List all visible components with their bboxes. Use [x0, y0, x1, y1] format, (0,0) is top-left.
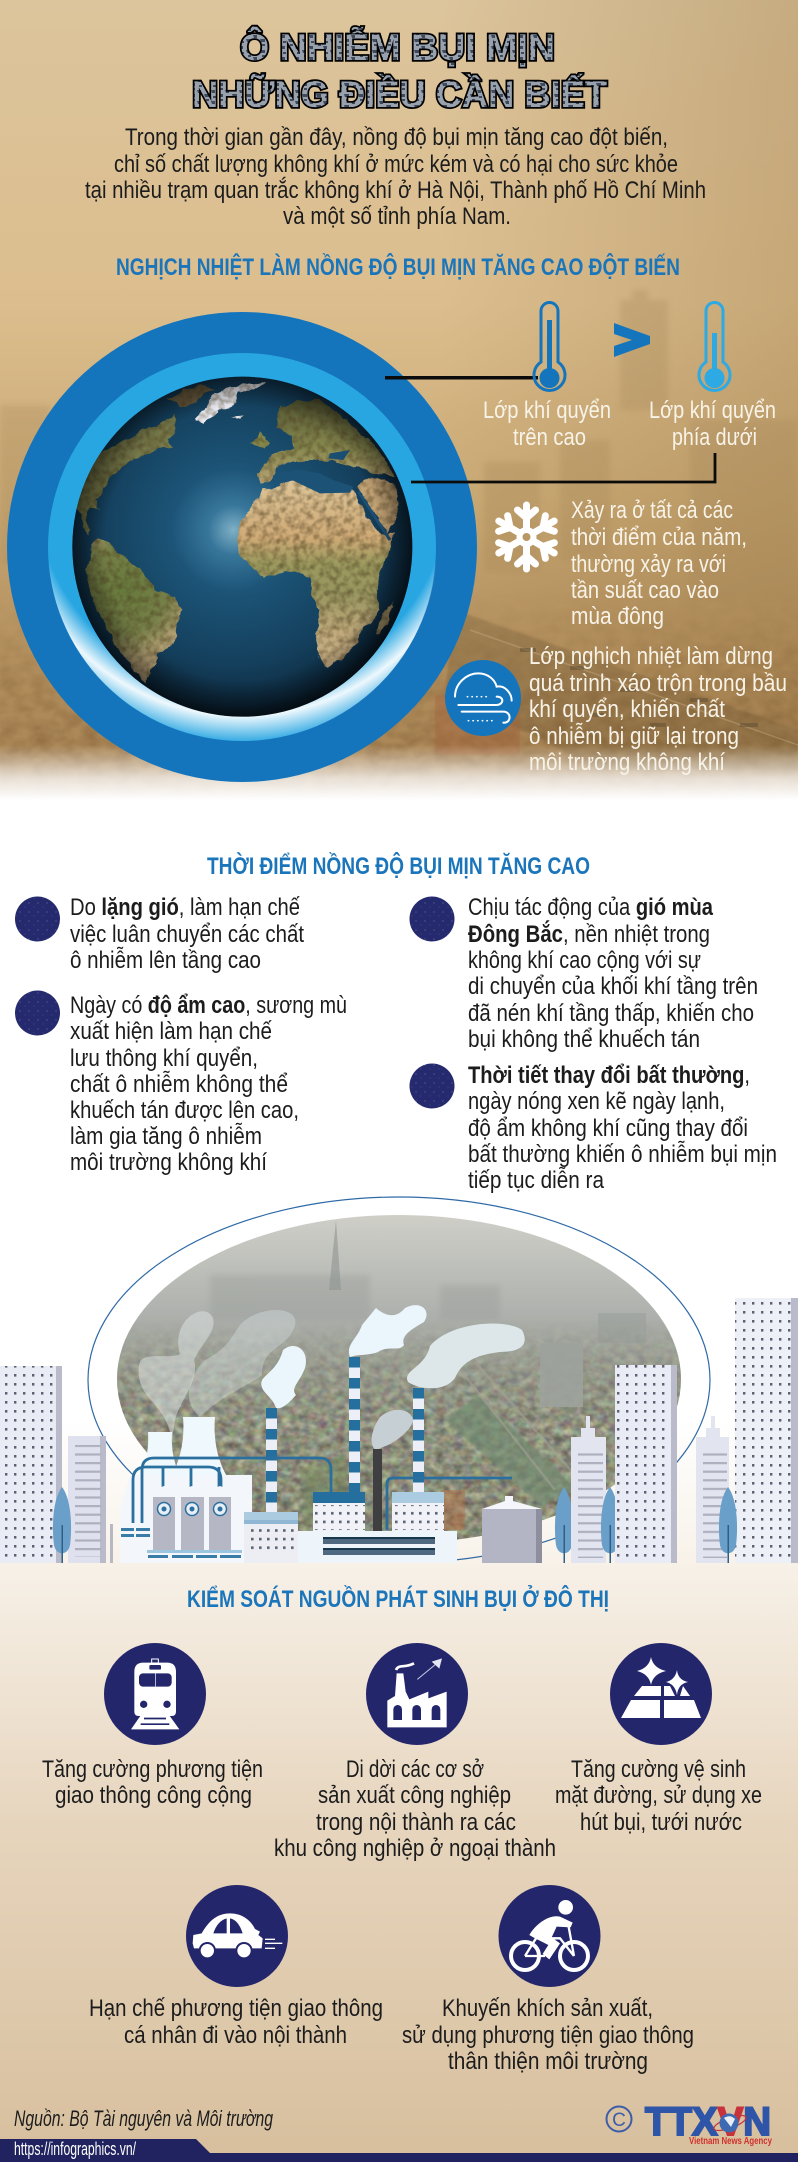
heading: control sources: KIỂM SOÁT NGUỒN PHÁT SINH BỤI Ở ĐÔ THỊ	[187, 1584, 609, 1613]
thermometer: upper layer	[534, 303, 565, 390]
bullet: northeast monsoon: di chuyển của khối khí tầng trên	[468, 973, 758, 1000]
bullet: abnormal weather: tiếp tục diễn ra	[468, 1167, 605, 1194]
title	[192, 26, 607, 115]
bullet: abnormal weather: Thời tiết thay đổi bất thường,	[468, 1062, 750, 1089]
pipes	[133, 1458, 512, 1530]
plant hall	[120, 1475, 252, 1563]
bullet: high humidity: chất ô nhiễm không thể	[70, 1071, 288, 1098]
building: spire tower	[571, 1416, 606, 1563]
logo: TTXVN	[606, 2100, 772, 2147]
bullet: no wind: Do lặng gió, làm hạn chế	[70, 894, 301, 921]
text: limit private vehicles	[89, 1995, 383, 2049]
icon: road cleaning	[610, 1643, 712, 1745]
building: dotted tower	[615, 1365, 677, 1563]
building: second spire tower	[696, 1416, 729, 1563]
text: when inversion occurs: tần suất cao vào	[571, 577, 719, 604]
bullet: high humidity: khuếch tán được lên cao,	[70, 1097, 299, 1124]
greater than sign	[614, 323, 650, 357]
lower panel background	[0, 1563, 798, 2162]
bullet: no wind	[15, 894, 304, 974]
plant base	[121, 1528, 242, 1558]
bullet: high humidity: làm gia tăng ô nhiễm	[70, 1123, 262, 1150]
power plant	[110, 1357, 542, 1563]
text: relocate factories: sản xuất công nghiệp	[318, 1782, 511, 1809]
label: lower layer: phía dưới	[672, 424, 757, 451]
cooling towers	[140, 1417, 228, 1478]
bullet: northeast monsoon: Chịu tác động của gió mùa	[468, 894, 714, 921]
label: lower layer	[649, 397, 776, 451]
small building	[244, 1512, 298, 1563]
text: when inversion occurs: Xảy ra ở tất cả các	[571, 497, 733, 524]
wordmark: TTXVN	[645, 2100, 771, 2144]
photo: smoggy city	[117, 1215, 681, 1540]
text: eco-friendly vehicles	[402, 1995, 694, 2075]
thermometer: lower layer	[699, 302, 730, 390]
outer atmosphere ring	[7, 312, 477, 782]
tree	[53, 1487, 71, 1563]
tree	[601, 1487, 619, 1563]
building: striped tower left	[68, 1436, 106, 1563]
agency name: Vietnam News Agency	[689, 2136, 772, 2147]
text: public transport	[42, 1756, 263, 1809]
bullet: abnormal weather	[410, 1062, 777, 1194]
text: eco-friendly vehicles: thân thiện môi trường	[448, 2048, 648, 2075]
label: upper layer	[483, 397, 611, 451]
building: far left tower	[0, 1366, 62, 1563]
url: https://infographics.vn/	[14, 2139, 136, 2159]
bullet: northeast monsoon: Đông Bắc, nền nhiệt trong	[468, 920, 710, 948]
text: road cleaning: hút bụi, tưới nước	[580, 1809, 742, 1836]
bullet: northeast monsoon	[410, 894, 758, 1053]
text: road cleaning	[555, 1756, 762, 1836]
text: effect of inversion: ô nhiễm bị giữ lại trong	[529, 723, 739, 750]
smoke plumes	[139, 1305, 525, 1450]
label: upper layer: trên cao	[513, 424, 586, 451]
line: lower layer	[411, 453, 715, 482]
text: relocate factories: khu công nghiệp ở ngoại thành	[274, 1835, 556, 1862]
text: effect of inversion	[529, 643, 787, 776]
text: when inversion occurs	[571, 497, 747, 630]
bullet: northeast monsoon: bụi không thể khuếch tán	[468, 1026, 700, 1053]
bullet: abnormal weather: ngày nóng xen kẽ ngày lạnh,	[468, 1088, 725, 1115]
footer bar	[0, 2139, 798, 2162]
bullet: high humidity: lưu thông khí quyển,	[70, 1045, 258, 1072]
text: effect of inversion: khí quyển, khiến chất	[529, 696, 725, 723]
intro text	[85, 124, 706, 230]
intro text: Trong thời gian gần đây, nồng độ bụi mịn tăng cao đột biến,	[125, 124, 668, 151]
text: eco-friendly vehicles: Khuyến khích sản xuất,	[442, 1995, 653, 2022]
intro text: chỉ số chất lượng không khí ở mức kém và có hại cho sức khỏe	[114, 151, 678, 178]
icon: snowflake	[494, 505, 559, 569]
reactors	[153, 1486, 231, 1550]
bullet: northeast monsoon: đã nén khí tầng thấp, khiến cho	[468, 1000, 754, 1027]
text: limit private vehicles: Hạn chế phương tiện giao thông	[89, 1995, 383, 2022]
text: public transport: giao thông công cộng	[55, 1782, 252, 1809]
icon: cyclist	[498, 1885, 600, 1987]
bullet: high humidity: xuất hiện làm hạn chế	[70, 1018, 273, 1045]
building with light roof	[392, 1492, 444, 1533]
ground gradient	[0, 1420, 798, 1563]
intro text: và một số tỉnh phía Nam.	[283, 203, 511, 230]
globe	[712, 2112, 748, 2134]
icon: factory relocation	[366, 1643, 468, 1745]
text: relocate factories	[274, 1756, 556, 1862]
text: public transport: Tăng cường phương tiện	[42, 1756, 263, 1783]
silo	[482, 1496, 542, 1563]
earth diagram	[7, 312, 715, 782]
bullet: high humidity	[15, 990, 347, 1176]
icon: car	[186, 1885, 288, 1987]
background: hazy city photo	[0, 0, 798, 800]
inner atmosphere ring	[48, 352, 437, 741]
chimney stacks	[266, 1357, 424, 1513]
polluted city scene	[0, 1197, 798, 1563]
turbine hall	[298, 1531, 457, 1563]
text: when inversion occurs: thường xảy ra với	[571, 551, 726, 578]
source: Nguồn: Bộ Tài nguyên và Môi trường	[14, 2106, 274, 2131]
title: Ô NHIỄM BỤI MỊN	[240, 26, 555, 68]
intro text: tại nhiều trạm quan trắc không khí ở Hà Nội, Thành phố Hồ Chí Minh	[85, 177, 706, 204]
bullet: northeast monsoon: không khí cao cộng với sự	[468, 947, 701, 974]
bullet: high humidity: môi trường không khí	[70, 1149, 267, 1176]
bullet: no wind: ô nhiễm lên tầng cao	[70, 947, 261, 974]
globe	[71, 375, 414, 718]
tree	[719, 1487, 737, 1563]
text: relocate factories: Di dời các cơ sở	[346, 1756, 484, 1783]
text: relocate factories: trong nội thành ra các	[316, 1809, 516, 1836]
bullet: no wind: việc luân chuyển các chất	[70, 921, 304, 948]
title: NHỮNG ĐIỀU CẦN BIẾT	[192, 73, 607, 115]
text: road cleaning: Tăng cường vệ sinh	[571, 1756, 746, 1783]
building with dark roof	[313, 1492, 365, 1533]
tree	[555, 1487, 573, 1563]
heading: when concentration rises: THỜI ĐIỂM NỒNG ĐỘ BỤI MỊN TĂNG CAO	[207, 852, 590, 880]
text: eco-friendly vehicles: sử dụng phương tiện giao thông	[402, 2022, 694, 2049]
building: far right tower	[735, 1298, 798, 1563]
line: upper layer	[385, 376, 538, 380]
text: when inversion occurs: thời điểm của năm,	[571, 524, 747, 551]
label: upper layer: Lớp khí quyển	[483, 397, 611, 424]
icon: train	[104, 1643, 206, 1745]
copyright mark	[606, 2106, 632, 2132]
label: lower layer: Lớp khí quyển	[649, 397, 776, 424]
text: when inversion occurs: mùa đông	[571, 603, 664, 630]
text: limit private vehicles: cá nhân đi vào nội thành	[124, 2022, 347, 2049]
text: effect of inversion: môi trường không khí	[529, 749, 725, 776]
bullet: high humidity: Ngày có độ ẩm cao, sương mù	[70, 992, 347, 1019]
copyright mark: C	[612, 2110, 626, 2131]
bullet: abnormal weather: độ ẩm không khí cũng thay đổi	[468, 1115, 748, 1142]
icon: cloud and wind	[445, 660, 521, 736]
ellipse outline	[88, 1197, 710, 1563]
